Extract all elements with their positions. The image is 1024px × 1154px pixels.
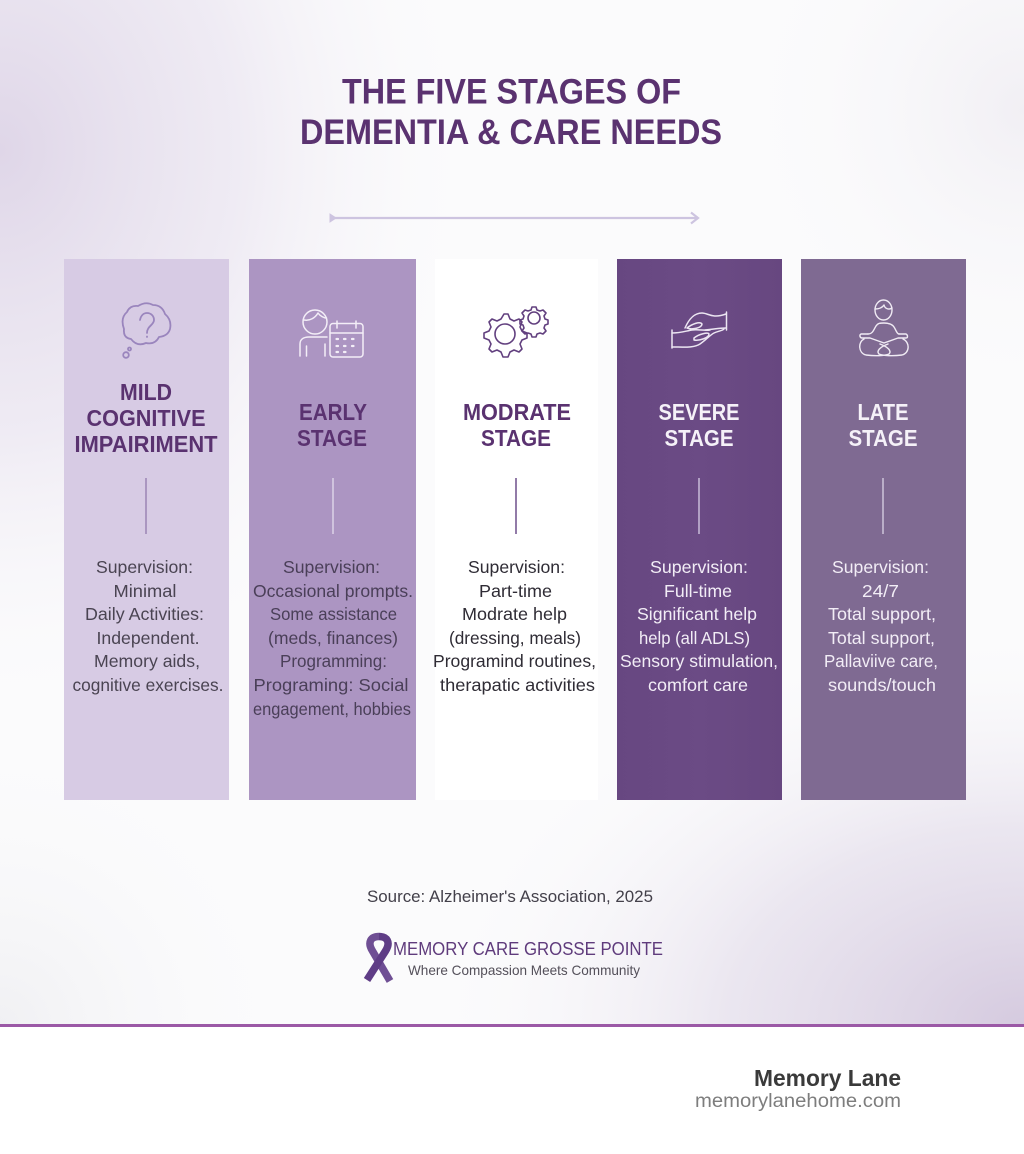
heading: STAGE [664, 425, 734, 451]
heading [658, 399, 740, 451]
body text: cognitive exercises. [72, 675, 224, 695]
heading: IMPAIRIMENT [74, 431, 218, 457]
panel: late stage [801, 259, 966, 800]
heading: STAGE [848, 425, 918, 451]
body text: Memory aids, [94, 651, 200, 671]
website: memorylanehome.com [695, 1091, 901, 1112]
body text: Significant help [637, 604, 757, 624]
heading [297, 399, 367, 451]
body text [824, 557, 938, 695]
body text: engagement, hobbies [253, 699, 411, 719]
body text: comfort care [648, 675, 748, 695]
body text: Daily Activities: [85, 604, 204, 624]
progression arrow [330, 212, 698, 224]
logo: memory care grosse pointe [367, 936, 663, 981]
body text: Full-time [664, 581, 732, 601]
divider [882, 478, 884, 534]
body text: Total support, [828, 604, 936, 624]
heading: COGNITIVE [86, 405, 206, 431]
heading: STAGE [481, 425, 551, 451]
divider [145, 478, 147, 534]
body text: (dressing, meals) [449, 628, 581, 648]
body text [72, 557, 224, 695]
body text [253, 557, 413, 719]
body text: sounds/touch [828, 675, 936, 695]
body text: Programing: Social [254, 675, 408, 695]
body text: therapatic activities [440, 675, 595, 695]
icon: person and calendar [300, 310, 363, 357]
body text: help (all ADLS) [639, 628, 750, 648]
body text [433, 557, 596, 695]
body text: Supervision: [96, 557, 193, 577]
body text: Programming: [280, 651, 387, 671]
heading: SEVERE [658, 399, 740, 425]
panel: mild cognitive impairment [64, 259, 229, 800]
body text: (meds, finances) [268, 628, 398, 648]
title: THE FIVE STAGES OF [342, 72, 681, 112]
body text: Minimal [114, 581, 176, 601]
body text: 24/7 [862, 581, 899, 601]
icon: ribbon [367, 936, 390, 981]
panel: severe stage [617, 259, 782, 800]
title: DEMENTIA & CARE NEEDS [300, 112, 722, 152]
body text: Occasional prompts. [253, 581, 413, 601]
body text: Independent. [96, 628, 200, 648]
heading [74, 379, 218, 457]
body text: Sensory stimulation, [620, 651, 778, 671]
body text: Pallaviive care, [824, 651, 938, 671]
divider [698, 478, 700, 534]
divider [332, 478, 334, 534]
icon: thought bubble with question mark [123, 303, 170, 358]
divider [515, 478, 517, 534]
icon: gears [484, 307, 548, 357]
panel: early stage [249, 259, 416, 800]
brand name: Memory Lane [754, 1065, 901, 1091]
heading [463, 399, 571, 451]
body text: Part-time [479, 581, 552, 601]
heading: STAGE [297, 425, 367, 451]
body text: Total support, [828, 628, 935, 648]
panel: moderate stage [433, 259, 598, 800]
body text: Supervision: [832, 557, 929, 577]
source line: Source: Alzheimer's Association, 2025 [367, 888, 653, 906]
heading [848, 399, 918, 451]
tagline: Where Compassion Meets Community [408, 962, 640, 978]
heading: MILD [120, 379, 172, 405]
body text: Supervision: [650, 557, 748, 577]
icon: helping hands [672, 312, 726, 348]
heading: LATE [858, 399, 908, 425]
body text: Modrate help [462, 604, 567, 624]
icon: meditating person [860, 300, 908, 356]
body text: Supervision: [283, 557, 380, 577]
title [300, 72, 722, 152]
organisation name: MEMORY CARE GROSSE POINTE [393, 939, 663, 959]
heading: EARLY [299, 399, 367, 425]
body text: Some assistance [270, 604, 397, 624]
body text [620, 557, 778, 695]
body text: Programind routines, [433, 651, 596, 671]
body text: Supervision: [468, 557, 565, 577]
footer bar [0, 1024, 1024, 1154]
heading: MODRATE [463, 399, 571, 425]
